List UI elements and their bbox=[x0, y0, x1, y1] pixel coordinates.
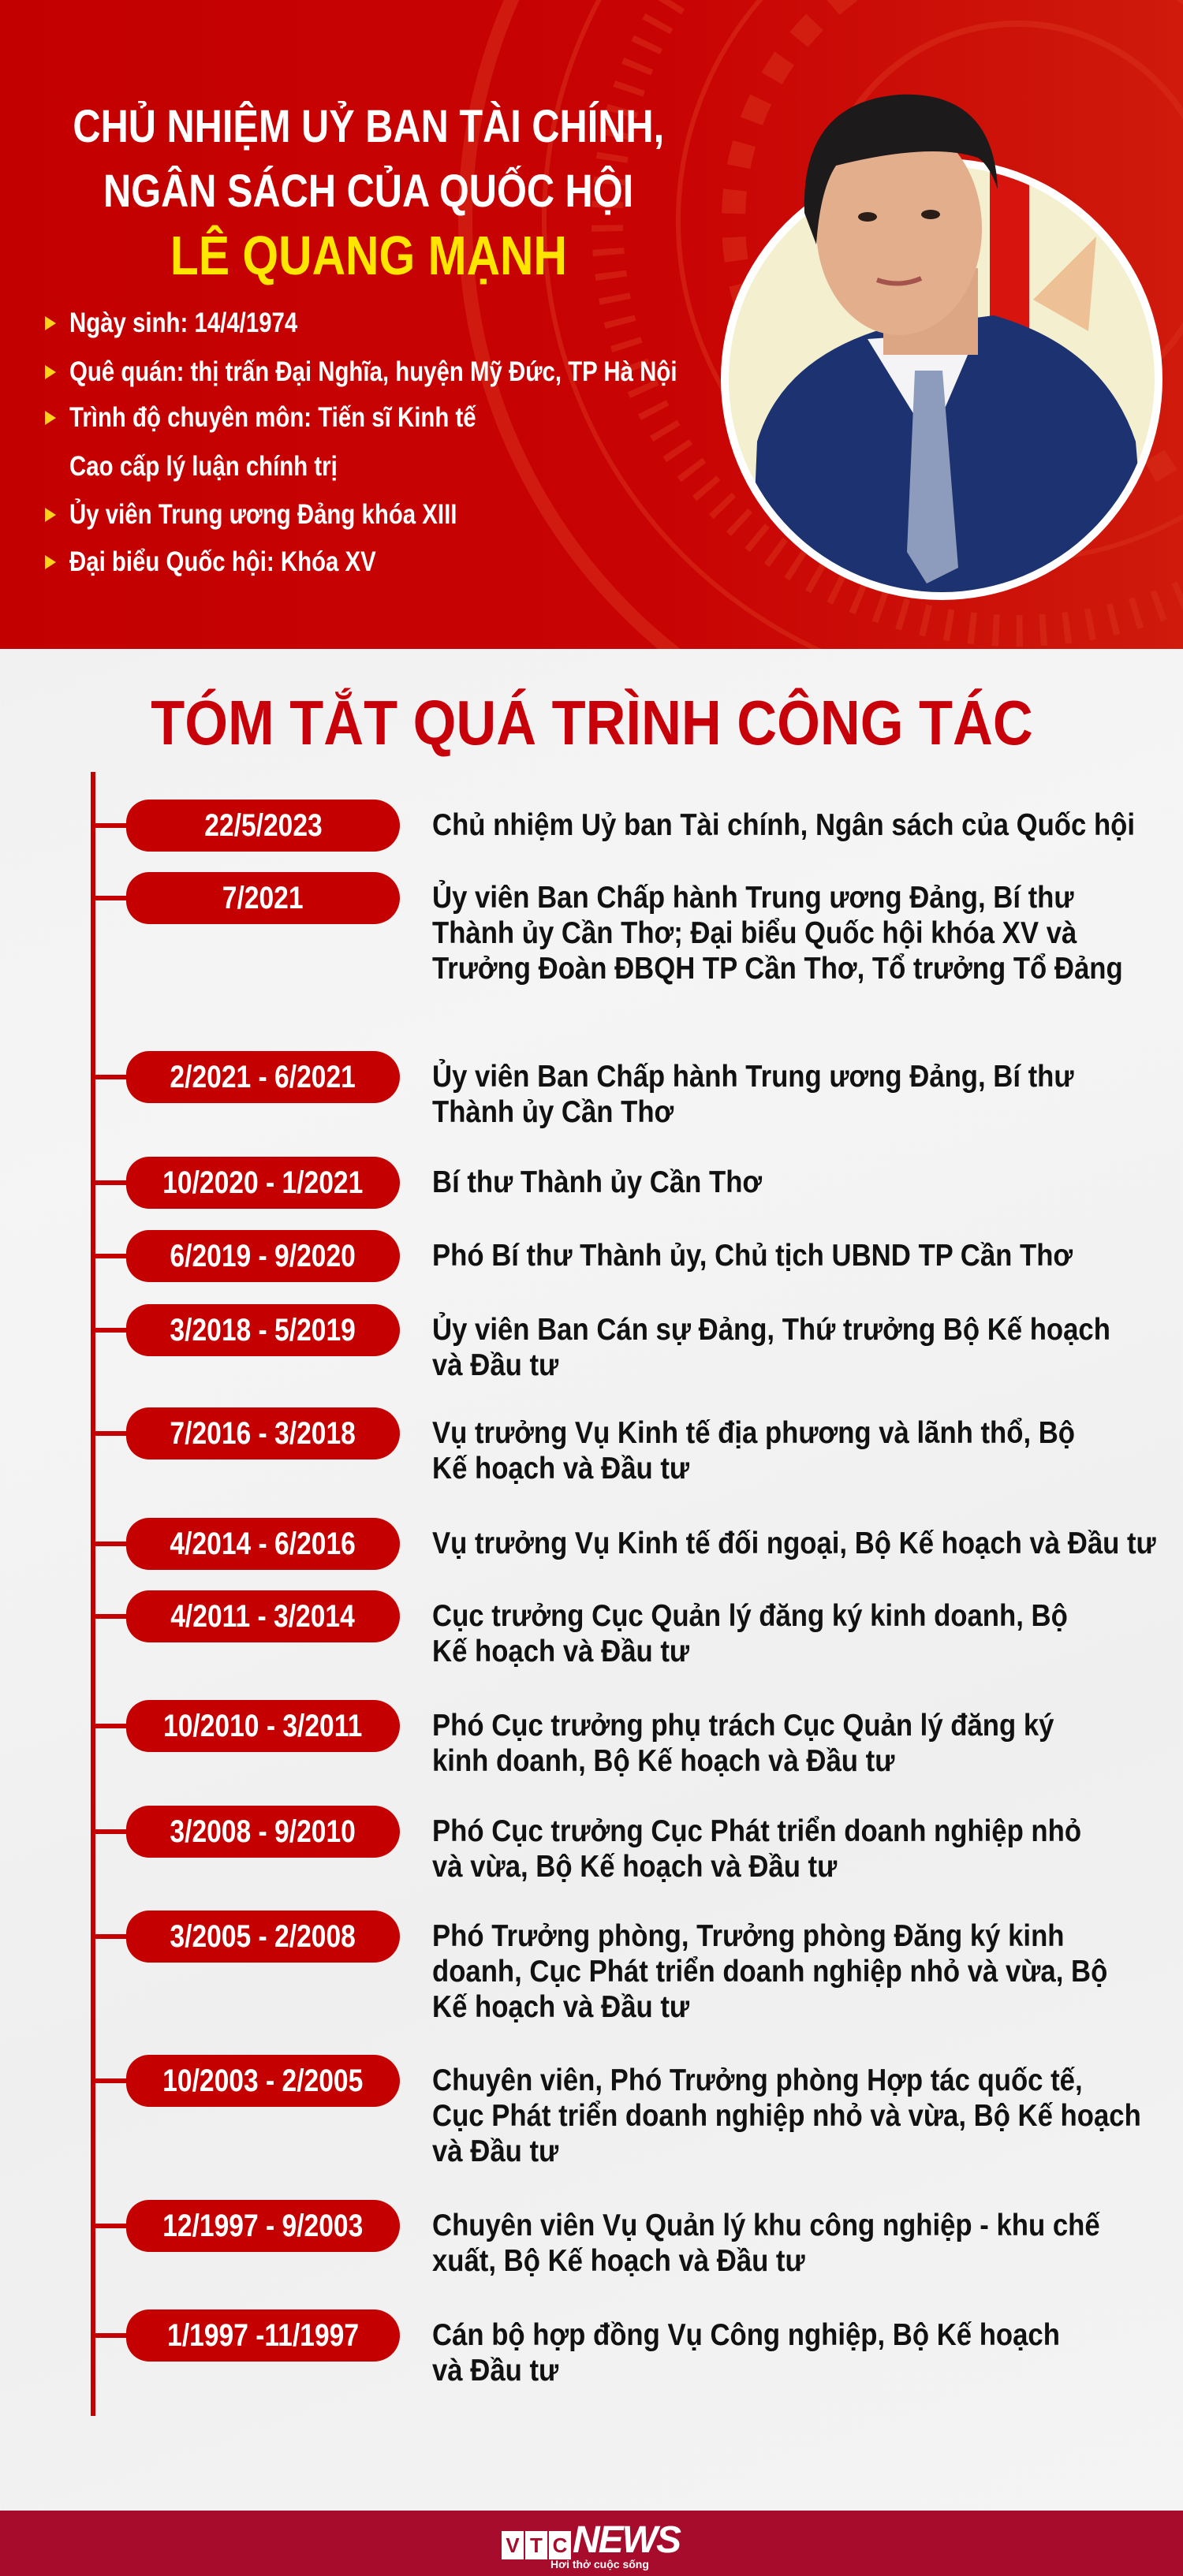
entry 10/2003: Chuyên viên, Phó Trưởng phòng Hợp tác quốc tế, bbox=[432, 2063, 1083, 2097]
logo: VTC News: T bbox=[530, 2533, 543, 2557]
entry 1/1997: và Đầu tư bbox=[432, 2354, 558, 2388]
entry 3/2005 bbox=[95, 1911, 1107, 2024]
bullet list: bio bbox=[45, 308, 677, 577]
entry 4/2014: Vụ trưởng Vụ Kinh tế đối ngoại, Bộ Kế hoạch và Đầu tư bbox=[432, 1527, 1156, 1560]
entry 1/1997 bbox=[95, 2309, 1060, 2388]
title: CHỦ NHIỆM UỶ BAN TÀI CHÍNH, bbox=[73, 101, 664, 152]
entry 2/2021: 2/2021 - 6/2021 bbox=[170, 1060, 356, 1094]
entry 10/2010: kinh doanh, Bộ Kế hoạch và Đầu tư bbox=[432, 1744, 894, 1778]
entry 10/2010 bbox=[95, 1700, 1054, 1778]
entry 4/2014 bbox=[95, 1518, 1156, 1570]
entry 6/2019 bbox=[95, 1230, 1073, 1282]
entry 4/2011 bbox=[95, 1590, 1068, 1668]
entry 10/2003: và Đầu tư bbox=[432, 2134, 558, 2168]
bullet list: bio: Cao cấp lý luận chính trị bbox=[69, 451, 338, 482]
entry 10/2010: 10/2010 - 3/2011 bbox=[163, 1709, 363, 1743]
bullet: hometown bbox=[45, 356, 677, 387]
entry 3/2018: và Đầu tư bbox=[432, 1348, 558, 1382]
entry 7/2016: Vụ trưởng Vụ Kinh tế địa phương và lãnh thổ, Bộ bbox=[432, 1416, 1075, 1450]
entry 7/2021 bbox=[95, 872, 1123, 986]
entry 3/2005: Kế hoạch và Đầu tư bbox=[432, 1990, 689, 2024]
entry 4/2011: 4/2011 - 3/2014 bbox=[171, 1599, 355, 1634]
entry 1/1997: Cán bộ hợp đồng Vụ Công nghiệp, Bộ Kế hoạch bbox=[432, 2318, 1060, 2352]
bullet list: bio: Đại biểu Quốc hội: Khóa XV bbox=[69, 546, 376, 577]
entry 7/2016: 7/2016 - 3/2018 bbox=[170, 1416, 356, 1451]
entry 10/2003: 10/2003 - 2/2005 bbox=[162, 2063, 364, 2098]
entry 2023: Chủ nhiệm Uỷ ban Tài chính, Ngân sách của Quốc hội bbox=[432, 808, 1135, 842]
bullet list: bio: Ủy viên Trung ương Đảng khóa XIII bbox=[69, 499, 457, 530]
entry 10/2010: Phó Cục trưởng phụ trách Cục Quản lý đăng ký bbox=[432, 1709, 1054, 1743]
entry 12/1997 bbox=[95, 2200, 1100, 2278]
entry 3/2008 bbox=[95, 1806, 1081, 1884]
title bbox=[73, 101, 664, 286]
header panel bbox=[0, 0, 1183, 649]
entry 3/2005: Phó Trưởng phòng, Trưởng phòng Đăng ký kinh bbox=[432, 1919, 1064, 1953]
portrait photo bbox=[721, 95, 1162, 600]
entry 10/2020: 10/2020 - 1/2021 bbox=[162, 1165, 364, 1200]
logo: VTC News: NEWS bbox=[573, 2519, 680, 2561]
timeline axis bbox=[91, 772, 95, 2416]
entry 7/2021: 7/2021 bbox=[222, 881, 304, 915]
entry 2/2021: Thành ủy Cần Thơ bbox=[432, 1095, 674, 1129]
entry 7/2016: Kế hoạch và Đầu tư bbox=[432, 1452, 689, 1486]
entry 3/2005: doanh, Cục Phát triển doanh nghiệp nhỏ và vừa, Bộ bbox=[432, 1955, 1107, 1989]
logo: VTC News: V bbox=[506, 2533, 520, 2557]
bullet list: bio: Ngày sinh: 14/4/1974 bbox=[69, 308, 297, 338]
entry 4/2011: Kế hoạch và Đầu tư bbox=[432, 1635, 689, 1668]
entry 3/2018: 3/2018 - 5/2019 bbox=[170, 1313, 356, 1348]
entry 3/2005: 3/2005 - 2/2008 bbox=[170, 1919, 356, 1954]
entry 2023: 22/5/2023 bbox=[204, 808, 322, 843]
bullet: national assembly bbox=[45, 546, 376, 577]
entry 1/1997: 1/1997 -11/1997 bbox=[167, 2318, 359, 2353]
title: NGÂN SÁCH CỦA QUỐC HỘI bbox=[103, 166, 634, 217]
bullet list: bio: Quê quán: thị trấn Đại Nghĩa, huyện Mỹ Đức, TP Hà Nội bbox=[69, 356, 677, 387]
entry 10/2020 bbox=[95, 1157, 762, 1209]
entry 2023 bbox=[95, 800, 1135, 852]
bullet list: bio: Trình độ chuyên môn: Tiến sĩ Kinh tế bbox=[69, 402, 476, 433]
entry 7/2016 bbox=[95, 1407, 1075, 1486]
neck/face bbox=[883, 268, 978, 355]
entry 3/2008: và vừa, Bộ Kế hoạch và Đầu tư bbox=[432, 1850, 837, 1884]
timeline bbox=[91, 772, 95, 2416]
entry 12/1997: xuất, Bộ Kế hoạch và Đầu tư bbox=[432, 2244, 805, 2278]
entry 4/2011: Cục trưởng Cục Quản lý đăng ký kinh doanh, Bộ bbox=[432, 1599, 1068, 1633]
entry 2/2021: Ủy viên Ban Chấp hành Trung ương Đảng, Bí thư bbox=[432, 1060, 1074, 1094]
head popping out bbox=[816, 122, 982, 335]
entry 12/1997: 12/1997 - 9/2003 bbox=[162, 2209, 364, 2243]
entry 10/2003 bbox=[95, 2055, 1141, 2168]
entry 6/2019: 6/2019 - 9/2020 bbox=[170, 1239, 356, 1273]
footer bbox=[0, 2511, 1183, 2576]
bullet: education bbox=[45, 402, 476, 433]
logo: VTC News bbox=[502, 2519, 681, 2570]
logo: VTC News: C bbox=[553, 2533, 567, 2557]
logo: VTC News: Hơi thở cuộc sống bbox=[550, 2558, 649, 2570]
entry 12/1997: Chuyên viên Vụ Quản lý khu công nghiệp - khu chế bbox=[432, 2209, 1100, 2242]
entry 2/2021 bbox=[95, 1051, 1074, 1129]
entry 10/2020: Bí thư Thành ủy Cần Thơ bbox=[432, 1165, 762, 1199]
entry 7/2021: Thành ủy Cần Thơ; Đại biểu Quốc hội khóa XV và bbox=[432, 916, 1077, 950]
bullet: central committee bbox=[45, 498, 457, 530]
title: LÊ QUANG MẠNH bbox=[170, 225, 567, 286]
entry 10/2003: Cục Phát triển doanh nghiệp nhỏ và vừa, Bộ Kế hoạch bbox=[432, 2099, 1141, 2133]
section heading: TÓM TẮT QUÁ TRÌNH CÔNG TÁC bbox=[151, 688, 1032, 758]
entry 7/2021: Trưởng Đoàn ĐBQH TP Cần Thơ, Tổ trưởng Tổ Đảng bbox=[432, 952, 1123, 986]
suit bbox=[756, 315, 1137, 592]
entry 6/2019: Phó Bí thư Thành ủy, Chủ tịch UBND TP Cần Thơ bbox=[432, 1239, 1073, 1273]
entry 4/2014: 4/2014 - 6/2016 bbox=[170, 1527, 356, 1561]
bullet: birth bbox=[45, 308, 298, 338]
decorative drum pattern bbox=[458, 0, 1183, 649]
entry 7/2021: Ủy viên Ban Chấp hành Trung ương Đảng, Bí thư bbox=[432, 881, 1074, 915]
entry 3/2008: 3/2008 - 9/2010 bbox=[170, 1814, 356, 1849]
entry 3/2018: Ủy viên Ban Cán sự Đảng, Thứ trưởng Bộ Kế hoạch bbox=[432, 1313, 1110, 1347]
entry 3/2008: Phó Cục trưởng Cục Phát triển doanh nghiệp nhỏ bbox=[432, 1814, 1081, 1848]
entry 3/2018 bbox=[95, 1304, 1110, 1382]
